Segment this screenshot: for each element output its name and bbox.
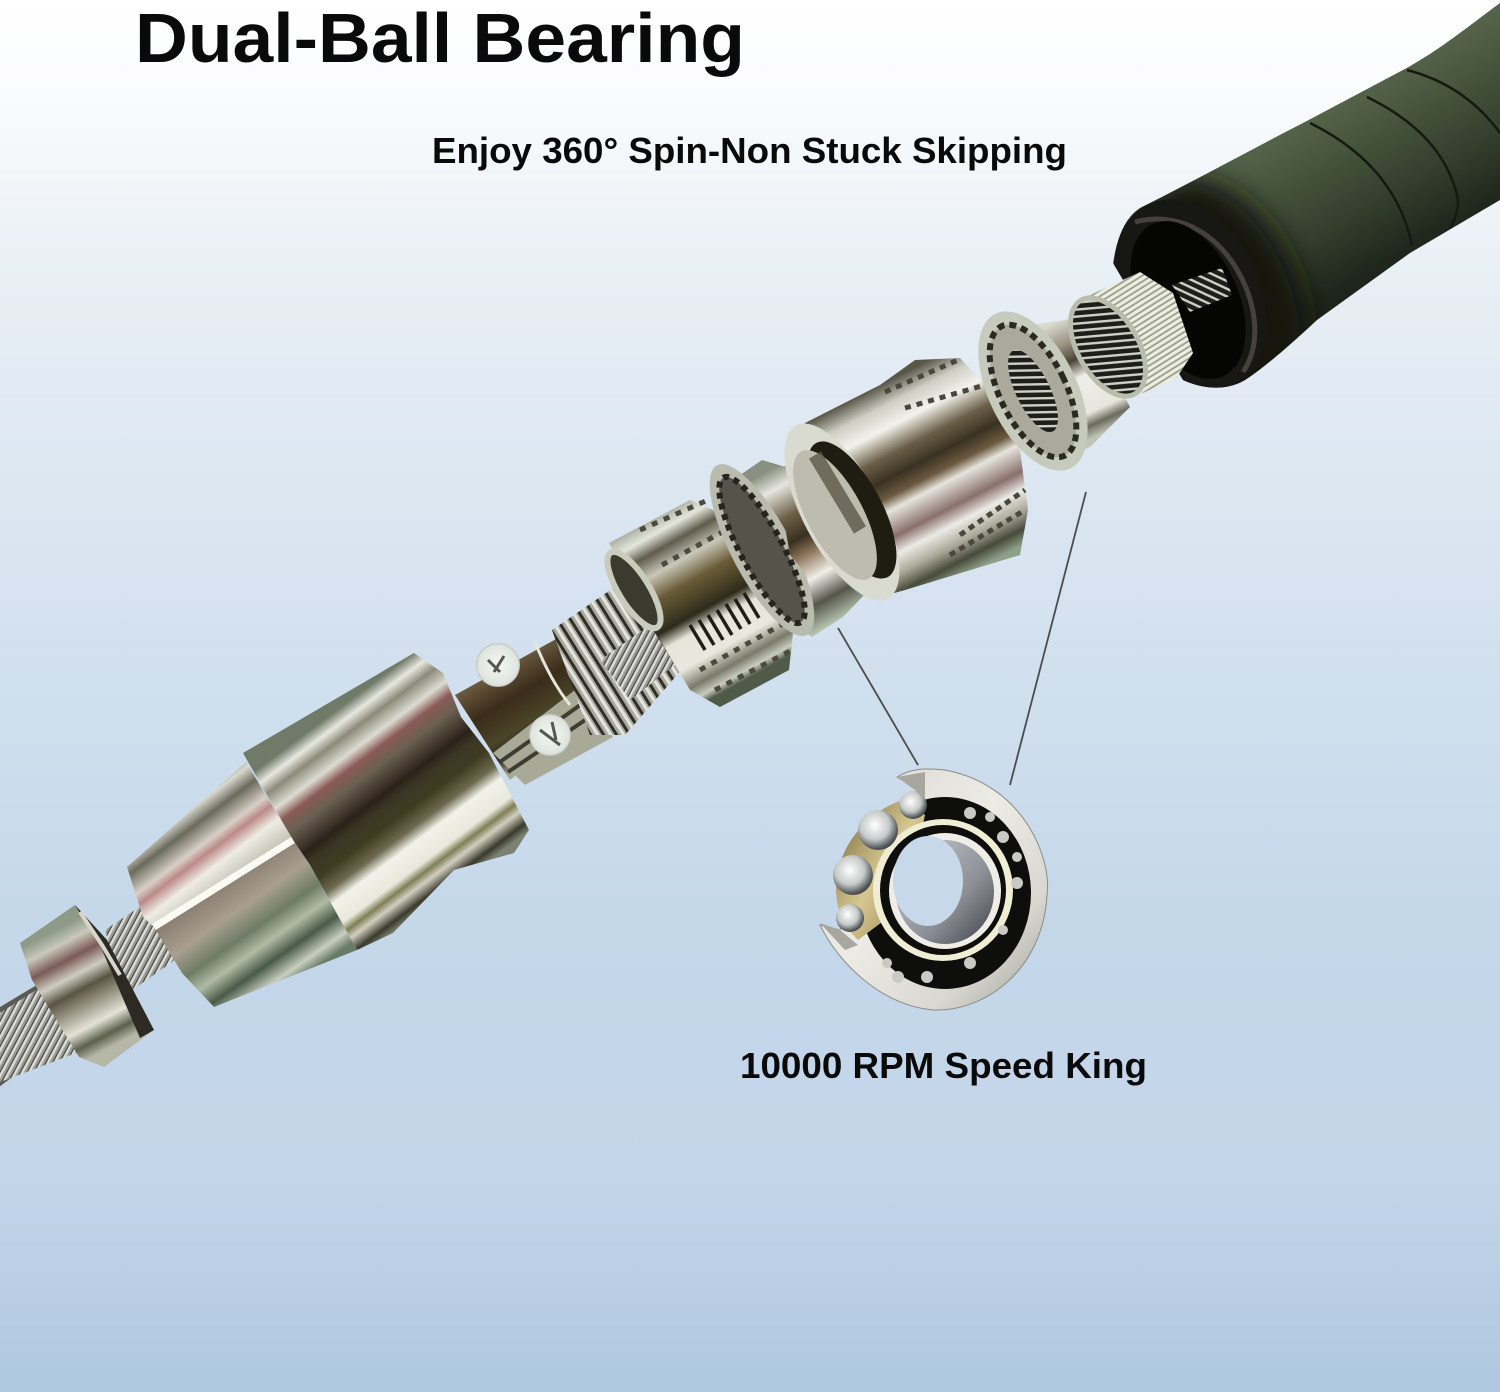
tip upper facet [127, 762, 293, 927]
bearing ball track [972, 312, 1094, 470]
lower race lip [820, 923, 858, 950]
steel cable end [0, 900, 190, 1090]
sleeve opening with rim [598, 545, 670, 635]
white race [889, 833, 1001, 949]
cone ferrule [127, 653, 529, 1007]
spring around cable [552, 580, 690, 735]
black ball track [859, 797, 1031, 989]
rim highlight [1135, 219, 1255, 372]
small stopper ring on cable [20, 905, 154, 1067]
cylinder rim [762, 407, 922, 617]
bright bevel edge [154, 840, 293, 927]
tip lower facet [154, 840, 357, 1007]
upper race lip [897, 772, 925, 800]
bearing caption: 10000 RPM Speed King [740, 1045, 1147, 1086]
first ball bearing [690, 451, 866, 649]
bearing cutaway detail [820, 769, 1048, 1010]
main body [243, 653, 529, 950]
collar face with twisted cable [1055, 285, 1161, 409]
dark shaft with steel balls [455, 633, 613, 785]
rim [1114, 200, 1233, 388]
threaded sleeve [598, 500, 793, 707]
bearing outer ring [956, 294, 1110, 488]
opening [1107, 203, 1269, 397]
outer race [820, 769, 1048, 1010]
shoulder shadow [1120, 166, 1321, 388]
threads lower [950, 490, 1025, 555]
cable inside handle [1172, 268, 1232, 312]
bearing face [690, 451, 834, 649]
see-through hole [893, 836, 963, 926]
bore surface [896, 840, 994, 944]
cable through bearing [998, 343, 1068, 439]
dark inner crescent [790, 429, 914, 591]
ribs [690, 593, 759, 650]
large threaded cylinder [762, 358, 1028, 617]
knurled collar [1055, 272, 1193, 409]
thread bumps top [640, 500, 735, 565]
cream inner ring [873, 819, 1013, 961]
grip grooves [1310, 70, 1500, 245]
second ball bearing near handle [956, 294, 1130, 488]
small balls in track [882, 807, 1023, 983]
callout leader lines [838, 492, 1086, 785]
exposed large balls [833, 791, 927, 932]
black inner ring [880, 825, 1006, 955]
thread bumps lower [700, 620, 792, 690]
subtitle: Enjoy 360° Spin-Non Stuck Skipping [432, 130, 1067, 171]
interior silver [776, 438, 894, 592]
handle grip [1113, 3, 1500, 388]
title: Dual-Ball Bearing [135, 0, 745, 77]
threads top [885, 360, 985, 408]
brass cage exposed side [836, 800, 925, 940]
